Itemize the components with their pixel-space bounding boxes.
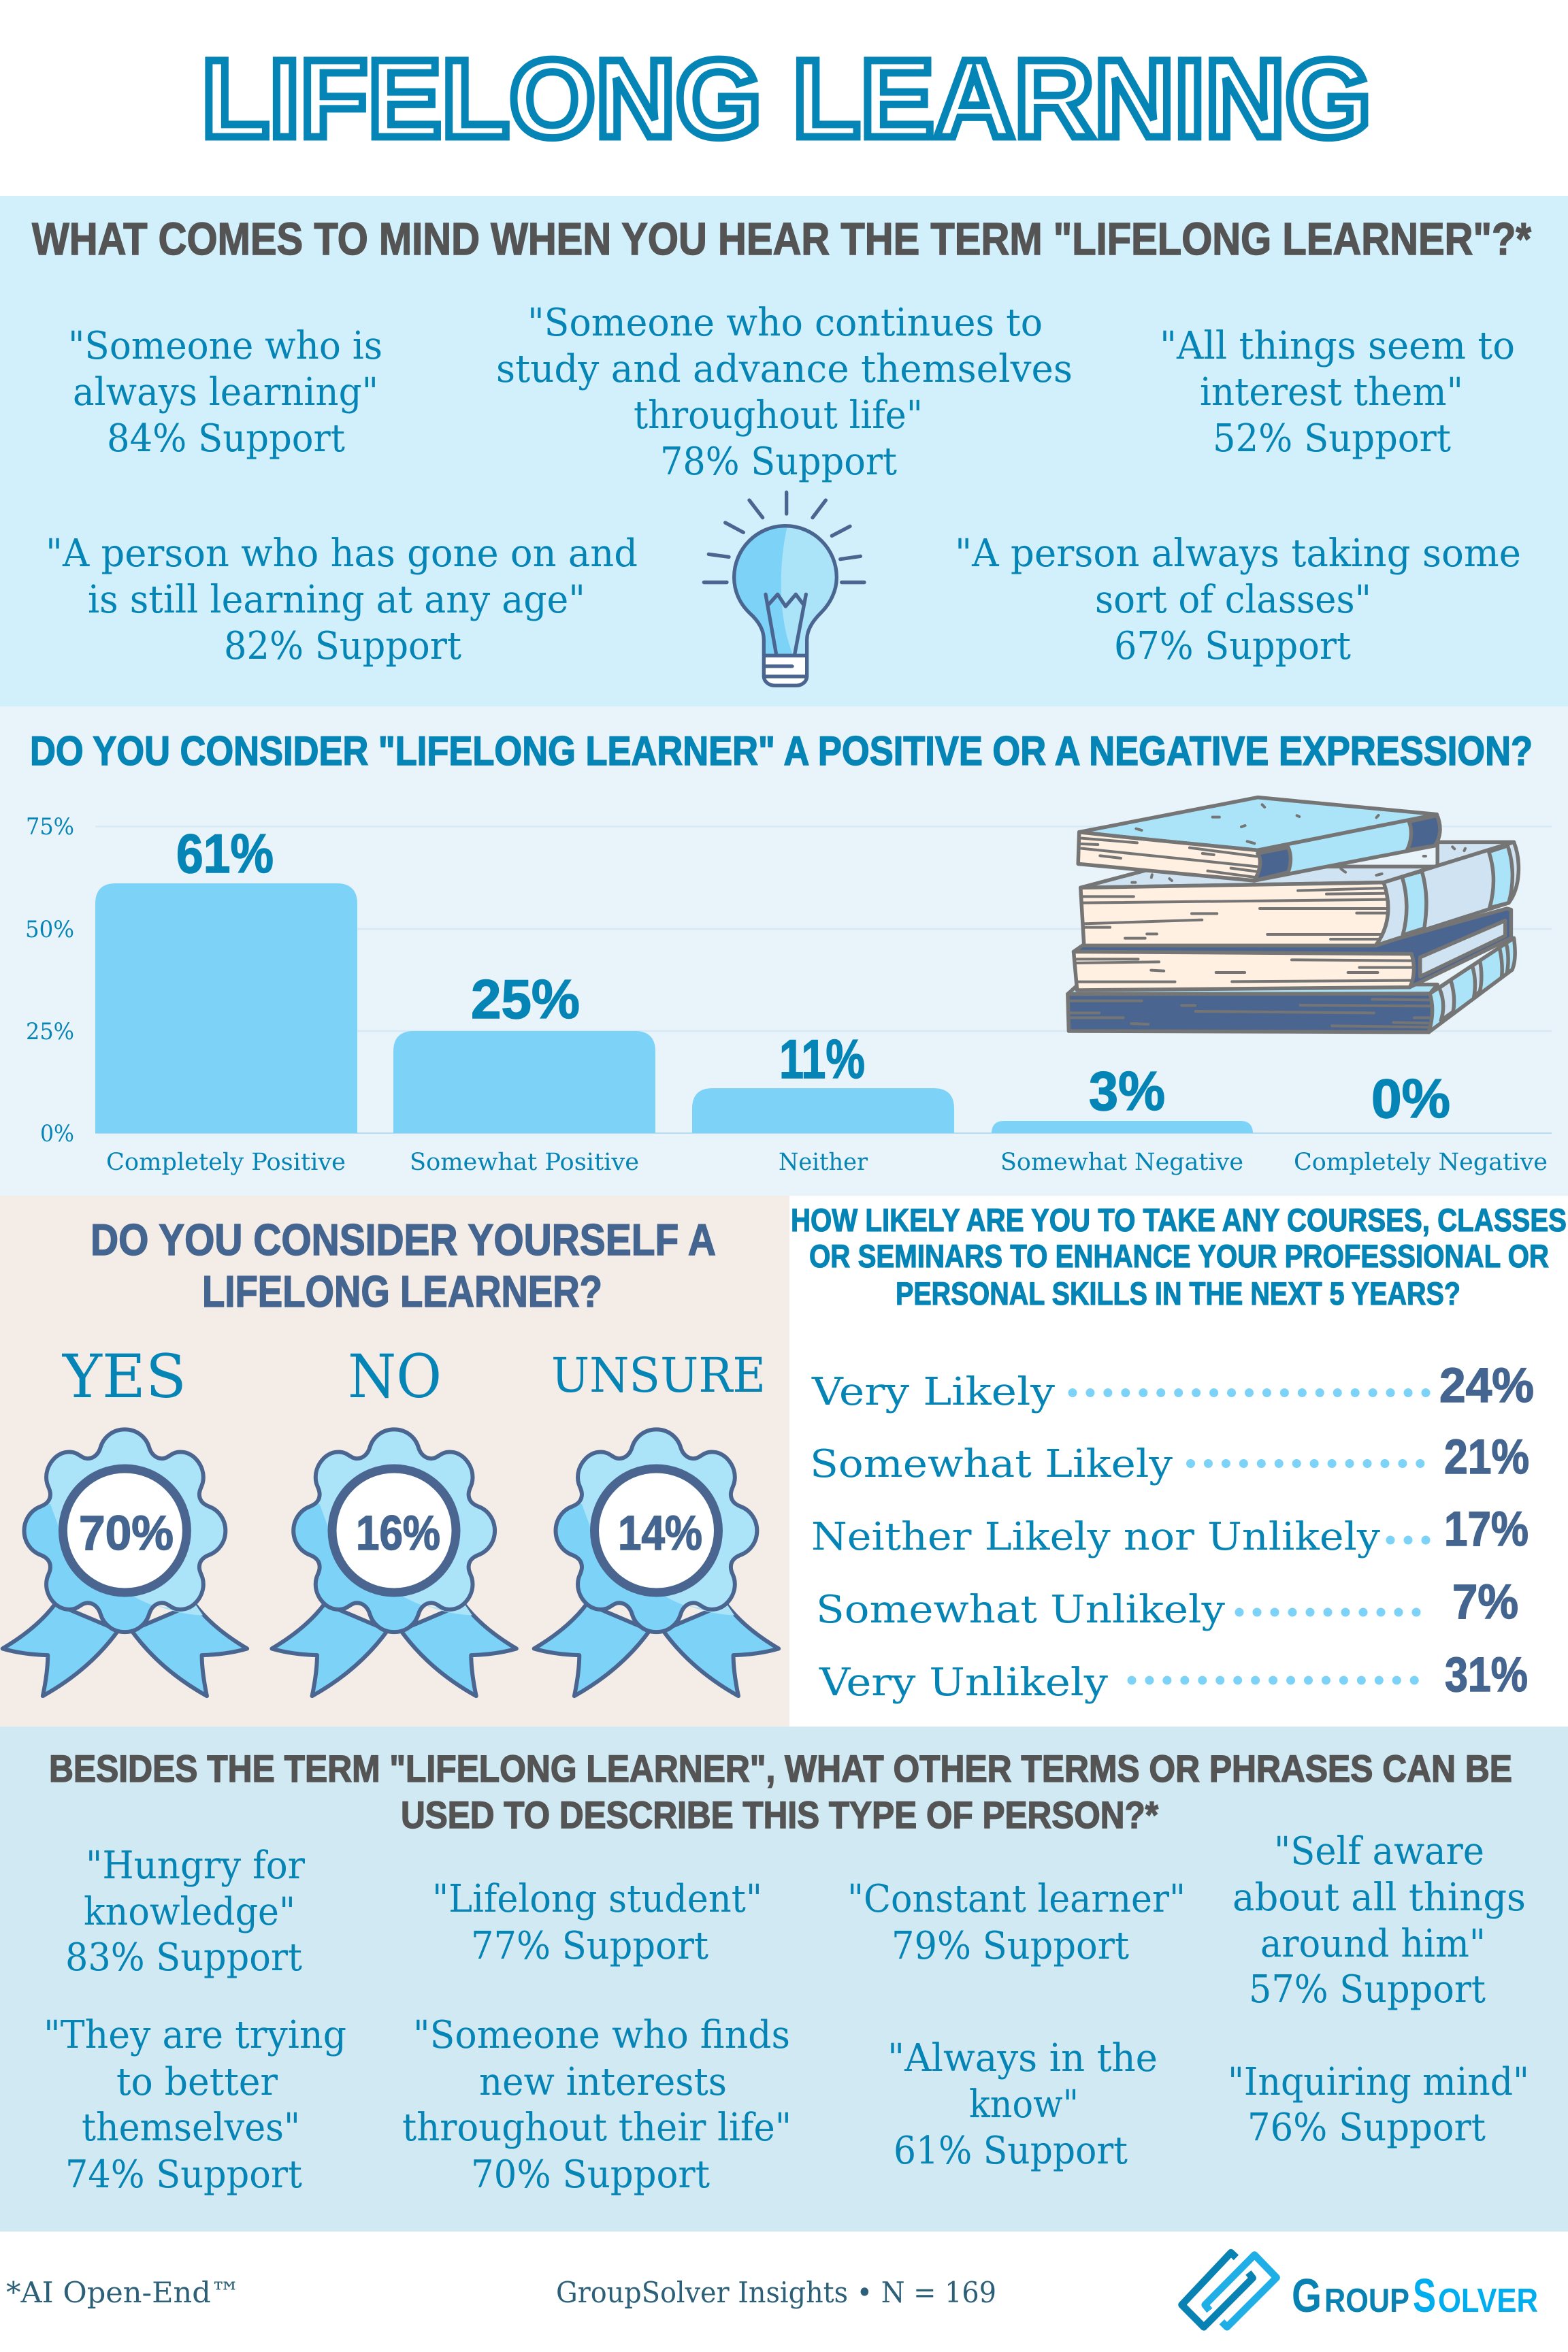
quote: taking classes: sort of classes"	[1095, 578, 1371, 622]
quote: still learning at any age: "A person who has gone on and	[46, 532, 638, 576]
logo wordmark	[1292, 2269, 1538, 2322]
row: neither 17%: 17%	[1444, 1503, 1529, 1556]
logo wordmark: OLVER	[1438, 2283, 1538, 2319]
row: somewhat unlikely 7%: 7%	[1452, 1575, 1518, 1629]
label: no: NO	[348, 1341, 442, 1411]
row: very likely 24%	[811, 1359, 1534, 1414]
quote: self aware: about all things	[1232, 1876, 1526, 1920]
quote: trying to better themselves: 74% Support	[65, 2153, 302, 2197]
bar value labels	[176, 823, 1450, 1130]
quote: taking classes: 67% Support	[1114, 624, 1351, 668]
heading: do you consider yourself: DO YOU CONSIDER YOURSELF A	[91, 1215, 716, 1264]
icon: ribbon yes 70%	[0, 1429, 252, 1696]
row: very unlikely 31%	[819, 1648, 1528, 1705]
quote: all things: 52% Support	[1213, 416, 1451, 461]
quote: all things: "All things seem to	[1160, 324, 1515, 368]
bar chart	[25, 813, 1552, 1176]
y axis labels: 50%	[25, 916, 74, 943]
category labels: Completely Negative	[1294, 1149, 1548, 1176]
quote: always in the know: 61% Support	[894, 2129, 1128, 2173]
icon: ribbon no 16%: 16%	[356, 1507, 440, 1561]
row: somewhat unlikely 7%: Somewhat Unlikely	[816, 1588, 1225, 1632]
quote: trying to better themselves: "They are trying	[44, 2013, 346, 2057]
y axis labels: 75%	[26, 813, 74, 840]
logo mark	[1181, 2253, 1277, 2327]
quote: self aware: 57% Support	[1249, 1967, 1486, 2012]
quote: trying to better themselves: themselves"	[82, 2106, 300, 2150]
bar value labels: 3%	[1089, 1061, 1165, 1122]
icon: stack of books	[1068, 798, 1518, 1032]
quote: lifelong student	[432, 1877, 762, 1968]
quote: hungry for knowledge: knowledge"	[84, 1890, 295, 1934]
bar: neither	[692, 1088, 954, 1133]
y axis labels: 0%	[40, 1120, 74, 1147]
bar value labels: 11%	[779, 1029, 865, 1090]
quote: finds new interests	[402, 2013, 791, 2197]
quote: all things: interest them"	[1200, 370, 1463, 414]
row: somewhat likely 21%	[810, 1431, 1529, 1486]
quote: still learning at any age	[46, 532, 638, 668]
quote: self aware: around him"	[1260, 1922, 1486, 1966]
bar value labels: 0%	[1371, 1068, 1450, 1130]
icon: ribbon no 16%	[270, 1429, 521, 1696]
quote: inquiring mind: "Inquiring mind"	[1228, 2060, 1529, 2104]
quote: trying to better themselves: to better	[116, 2060, 278, 2104]
footer	[6, 2253, 1538, 2327]
title: LIFELONG LEARNING	[201, 36, 1371, 161]
bar: somewhat negative	[992, 1121, 1253, 1133]
heading: other terms	[49, 1747, 1512, 1836]
panel: lifelong learner self-identification	[0, 1196, 789, 1727]
bar value labels: 25%	[471, 969, 580, 1030]
heading: how likely	[791, 1202, 1567, 1311]
quote: always learning: "Someone who is	[68, 324, 382, 368]
icon: ribbon unsure 14%: 14%	[618, 1507, 702, 1561]
row: neither 17%	[811, 1503, 1529, 1559]
quote: inquiring mind: 76% Support	[1247, 2106, 1486, 2150]
quote: hungry for knowledge: 83% Support	[65, 1936, 302, 1980]
panel: what comes to mind	[0, 196, 1568, 706]
quote: constant learner	[847, 1877, 1186, 1968]
row: very likely 24%: Very Likely	[811, 1370, 1055, 1414]
category labels: Somewhat Positive	[410, 1149, 639, 1176]
quote: continues to study: 78% Support	[660, 440, 897, 484]
quote: still learning at any age: 82% Support	[224, 624, 461, 668]
panel: other terms	[0, 1727, 1568, 2232]
icon: ribbon yes 70%: 70%	[79, 1507, 174, 1561]
row: very likely 24%: 24%	[1439, 1359, 1534, 1413]
category labels: Somewhat Negative	[1000, 1149, 1243, 1176]
row: very unlikely 31%: 31%	[1445, 1648, 1528, 1702]
logo: GroupSolver	[1181, 2253, 1538, 2327]
quote: constant learner: 79% Support	[892, 1924, 1129, 1968]
bar: completely positive	[95, 883, 357, 1133]
logo wordmark: G	[1292, 2269, 1322, 2322]
logo wordmark: S	[1413, 2269, 1436, 2322]
category labels: Completely Positive	[106, 1149, 346, 1176]
panel: positive or negative	[0, 706, 1568, 1196]
icon: light bulb	[704, 492, 864, 685]
quote: finds new interests: throughout their life"	[402, 2106, 791, 2150]
category labels: Neither	[779, 1149, 868, 1176]
icon: ribbon unsure 14%	[532, 1429, 783, 1696]
heading: do you consider yourself: LIFELONG LEARNER?	[202, 1267, 602, 1316]
quote: hungry for knowledge: "Hungry for	[86, 1844, 305, 1888]
quote: taking classes: "A person always taking some	[955, 532, 1521, 576]
quote: lifelong student: "Lifelong student"	[432, 1877, 762, 1921]
row: somewhat likely 21%: 21%	[1444, 1431, 1529, 1484]
logo wordmark: ROUP	[1324, 2283, 1409, 2319]
heading: other terms: USED TO DESCRIBE THIS TYPE OF PERSON?*	[401, 1793, 1158, 1836]
heading: do you consider yourself	[91, 1215, 716, 1316]
quote: finds new interests: "Someone who finds	[413, 2013, 790, 2057]
quote: always learning: always learning"	[73, 370, 378, 414]
quote: always in the know	[887, 2036, 1158, 2173]
source line: GroupSolver Insights • N = 169	[556, 2276, 996, 2309]
quote: always in the know: know"	[969, 2082, 1079, 2127]
quote: self aware: "Self aware	[1274, 1829, 1484, 1874]
quote: trying to better themselves	[44, 2013, 346, 2197]
quote: self aware	[1232, 1829, 1526, 2012]
quote: continues to study: throughout life"	[634, 393, 923, 438]
quote: finds new interests: 70% Support	[471, 2153, 710, 2197]
quote: continues to study: "Someone who continues to	[527, 301, 1043, 345]
quote: lifelong student: 77% Support	[471, 1924, 708, 1968]
heading: how likely: PERSONAL SKILLS IN THE NEXT 5 YEARS?	[896, 1275, 1460, 1311]
y axis labels	[25, 813, 74, 1147]
y axis labels: 25%	[26, 1018, 74, 1045]
row: very unlikely 31%: Very Unlikely	[819, 1661, 1108, 1705]
quote: inquiring mind	[1228, 2060, 1529, 2150]
row: somewhat likely 21%: Somewhat Likely	[810, 1442, 1173, 1486]
bar value labels: 61%	[176, 823, 274, 885]
row: neither 17%: Neither Likely nor Unlikely	[811, 1515, 1380, 1559]
quote: always in the know: "Always in the	[887, 2036, 1158, 2080]
label: yes: YES	[62, 1341, 186, 1411]
quote: always learning: 84% Support	[107, 416, 345, 461]
panel: likelihood of taking courses	[791, 1202, 1567, 1705]
quote: all things	[1160, 324, 1515, 461]
quote: always learning	[68, 324, 382, 461]
quote: constant learner: "Constant learner"	[847, 1877, 1186, 1921]
quote: hungry for knowledge	[65, 1844, 305, 1980]
quote: taking classes	[955, 532, 1521, 668]
quote: finds new interests: new interests	[479, 2060, 727, 2104]
quote: still learning at any age: is still learning at any age"	[88, 578, 585, 622]
category labels	[106, 1149, 1548, 1176]
row: somewhat unlikely 7%	[816, 1575, 1518, 1632]
quote: continues to study	[496, 301, 1073, 484]
quote: continues to study: study and advance themselves	[496, 347, 1073, 391]
bar: somewhat positive	[393, 1031, 655, 1133]
label: unsure: UNSURE	[551, 1348, 766, 1403]
footnote: *AI Open-End™	[6, 2276, 240, 2309]
